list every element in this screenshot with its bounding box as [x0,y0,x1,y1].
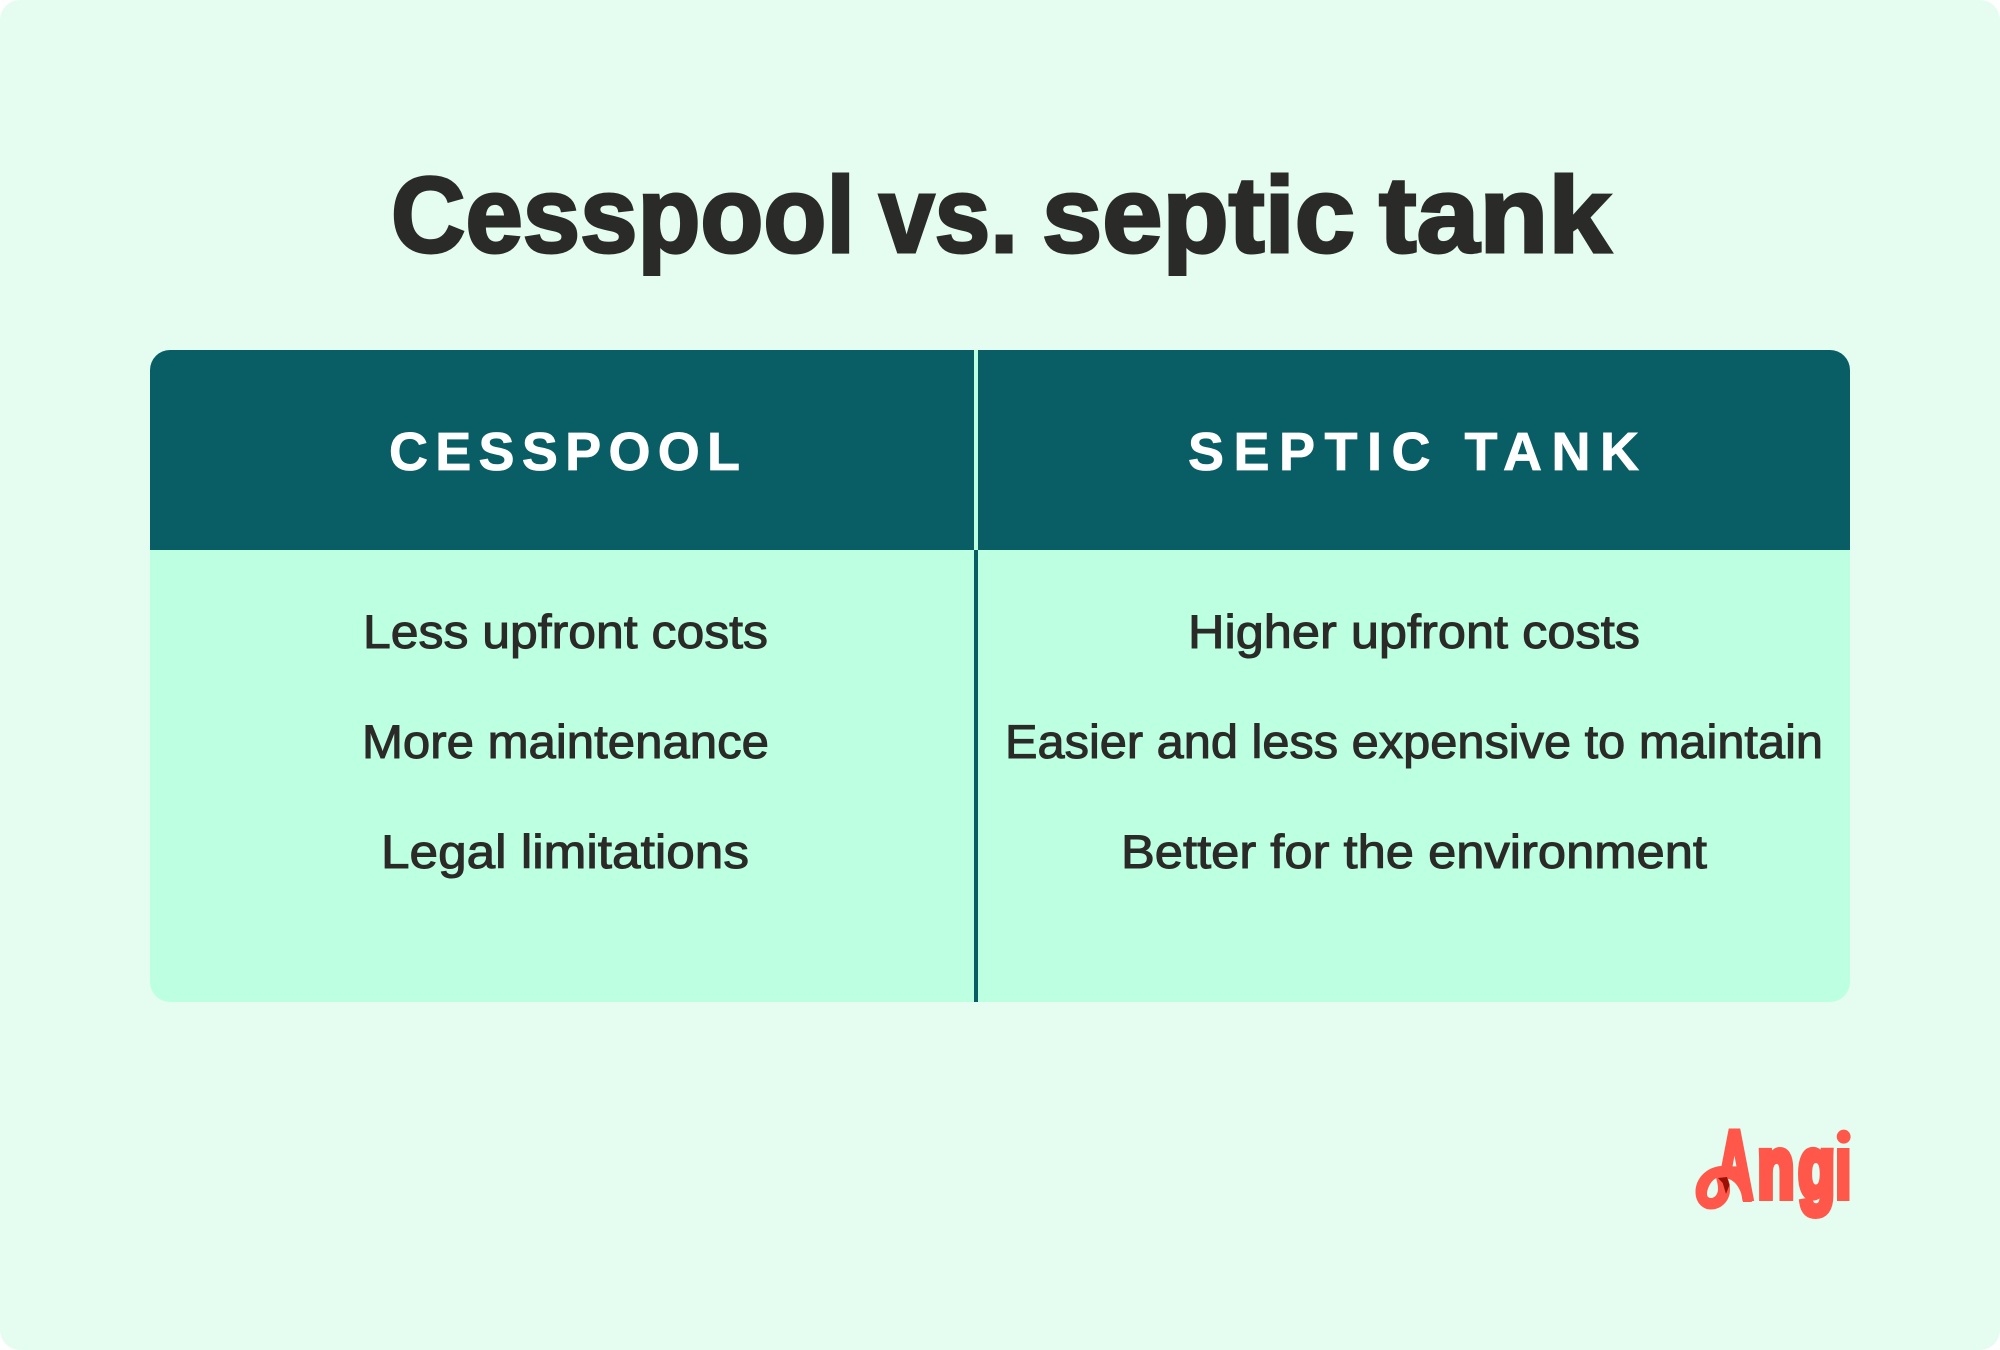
column: septic tank [1005,422,1823,878]
title: Cesspool [391,154,855,275]
logo letter g: g [1798,1121,1835,1216]
heading: septic tank: SEPTIC TANK [1188,422,1639,482]
comparison table [150,350,1850,1002]
logo letter A: A [1716,1112,1752,1217]
title: vs. [879,154,1018,275]
logo letter i: i [1830,1112,1856,1223]
column divider: header [974,350,978,550]
column divider: body [974,550,978,1002]
item: legal limitations: Legal limitations [381,825,749,878]
table header background [150,350,1850,550]
item: less upfront costs: Less upfront costs [363,605,768,658]
item: more maintenance: More maintenance [362,715,769,768]
item: higher upfront costs: Higher upfront costs [1188,605,1640,658]
item: easier and less expensive to maintain: Easier and less expensive to maintain [1005,715,1823,768]
item: better for the environment: Better for the environment [1121,825,1707,878]
table body background [150,550,1850,1002]
title: septic [1042,154,1355,275]
logo swash overlap [1718,1177,1730,1194]
logo swash loop [1696,1166,1752,1210]
heading: cesspool: CESSPOOL [389,422,740,482]
title: tank [1379,154,1612,275]
logo: Angi [1696,1128,1851,1219]
logo i dot [1837,1130,1851,1144]
logo letter n: n [1758,1121,1794,1216]
column: cesspool [362,422,769,878]
